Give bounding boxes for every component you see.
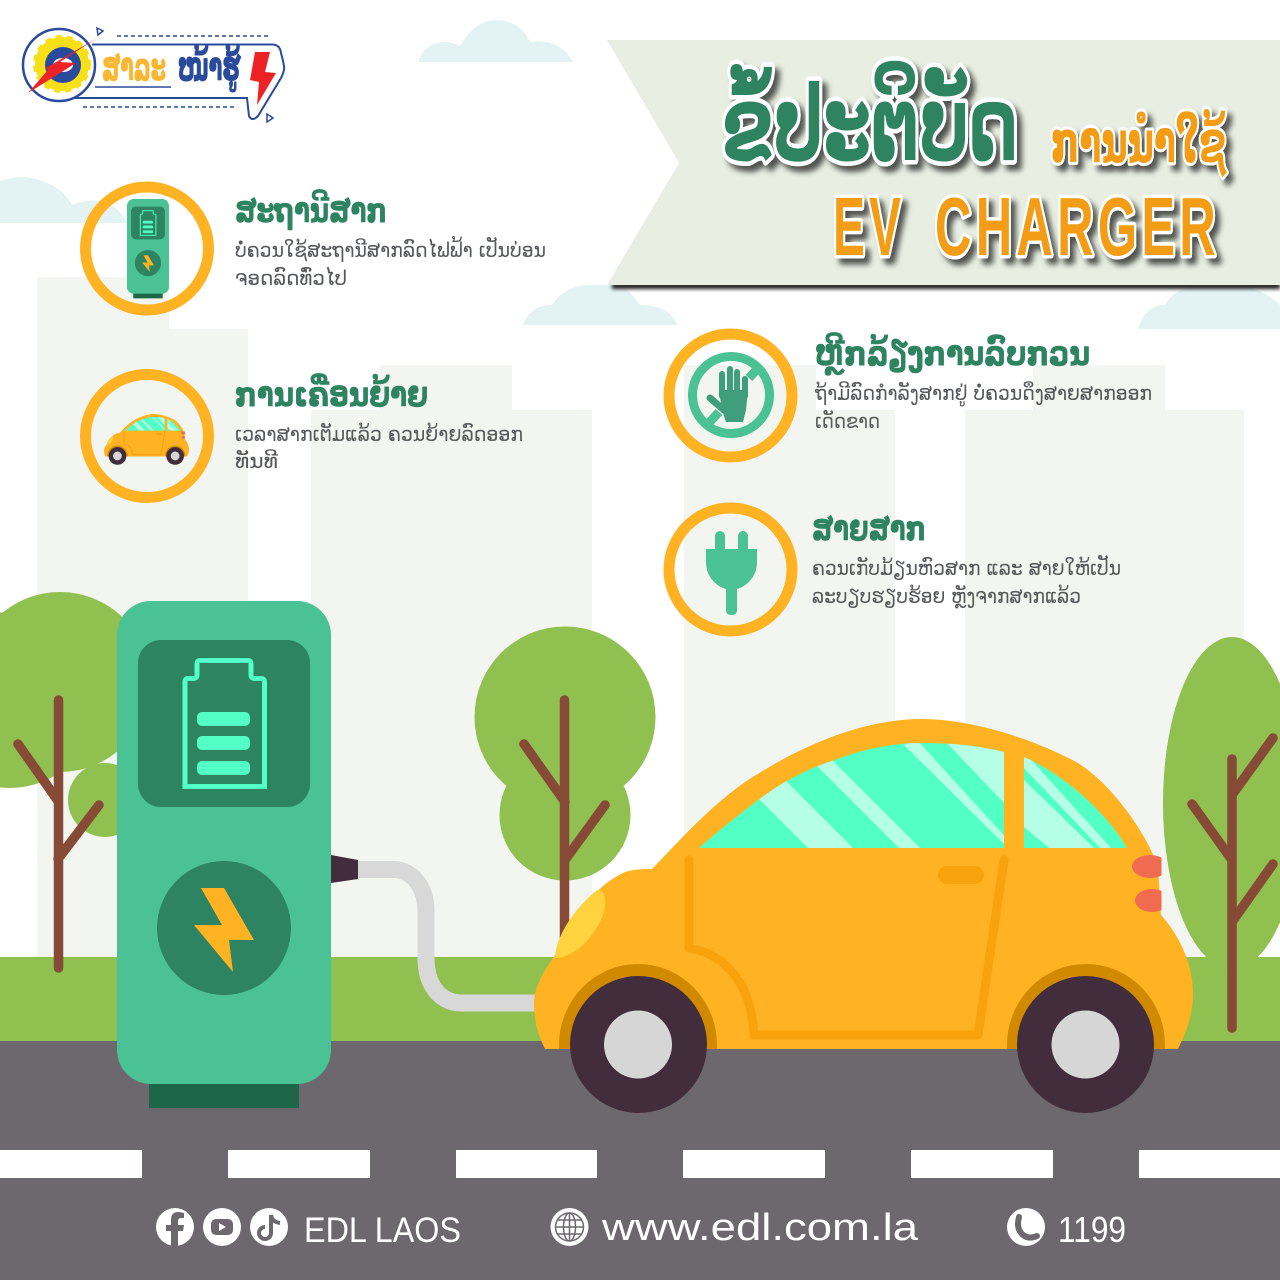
icon: youtube [203, 1208, 241, 1246]
description: moving: ທັນທີ [235, 449, 278, 473]
description: station: ບໍ່ຄວນໃຊ້ສະຖານີສາກລົດໄຟຟ້າ ເປັນບ່ອນ [235, 237, 546, 262]
description: avoid: ຖ້າມີລົດກຳລັງສາກຢູ່ ບໍ່ຄວນດຶງສາຍສາກອອກ [814, 381, 1152, 407]
heading: cable: ສາຍສາກ [812, 509, 926, 549]
heading: moving: ການເຄື່ອນຍ້າຍ [235, 373, 428, 415]
phone number: 1199 [1058, 1209, 1126, 1250]
icon: no touching hand [669, 334, 792, 457]
tree: right [1163, 637, 1280, 1028]
charging cable and plug [331, 855, 545, 1003]
description: cable: ຄວນເກັບມ້ຽນຫົວສາກ ແລະ ສາຍໃຫ້ເປັນ [812, 555, 1121, 580]
description: moving: ເວລາສາກເຕັມແລ້ວ ຄວນຍ້າຍລົດອອກ [235, 422, 523, 446]
item: charging cable [669, 508, 1121, 631]
road [0, 1041, 1280, 1280]
website: www.edl.com.la [601, 1207, 919, 1249]
footer contacts [156, 1207, 1126, 1250]
description: avoid: ເດັດຂາດ [815, 409, 880, 433]
tree: middle [474, 626, 656, 958]
title text [722, 60, 1227, 273]
icon: mini car [86, 374, 208, 498]
heading: avoid: ຫຼີກລ້ຽງການລົບກວນ [815, 332, 1090, 376]
brand name: EDL LAOS [304, 1211, 461, 1250]
icon: phone [1007, 1208, 1045, 1246]
icon: mini charger [86, 187, 208, 310]
logo [23, 28, 284, 122]
item: charging station [86, 187, 546, 310]
clouds [0, 20, 1280, 329]
heading: station: ສະຖານີສາກ [235, 189, 387, 231]
icon: globe [550, 1208, 588, 1246]
title line 2: EV [833, 180, 905, 273]
icon: plug [669, 508, 792, 631]
icon: facebook [156, 1208, 194, 1246]
grass strip [0, 957, 1280, 1041]
electric car [534, 719, 1193, 1126]
charging station [117, 601, 331, 1108]
title line 1: ribbon heading: ຂໍ້ປະຕິບັດ [722, 60, 1018, 185]
item: avoid interruption [669, 332, 1152, 457]
description: station: ຈອດລົດທົ່ວໄປ [235, 266, 347, 290]
description: cable: ລະບຽບຮຽບຮ້ອຍ ຫຼັງຈາກສາກແລ້ວ [812, 584, 1081, 609]
icon: tiktok [250, 1208, 288, 1246]
tree: left [0, 592, 150, 968]
item: moving the car [86, 373, 523, 498]
logo: ສາລະ [102, 46, 166, 89]
title banner [607, 40, 1280, 289]
logo: ໜ້າຮູ້ [178, 45, 241, 92]
road lane dashes [0, 1150, 1280, 1178]
background buildings [37, 277, 1244, 958]
